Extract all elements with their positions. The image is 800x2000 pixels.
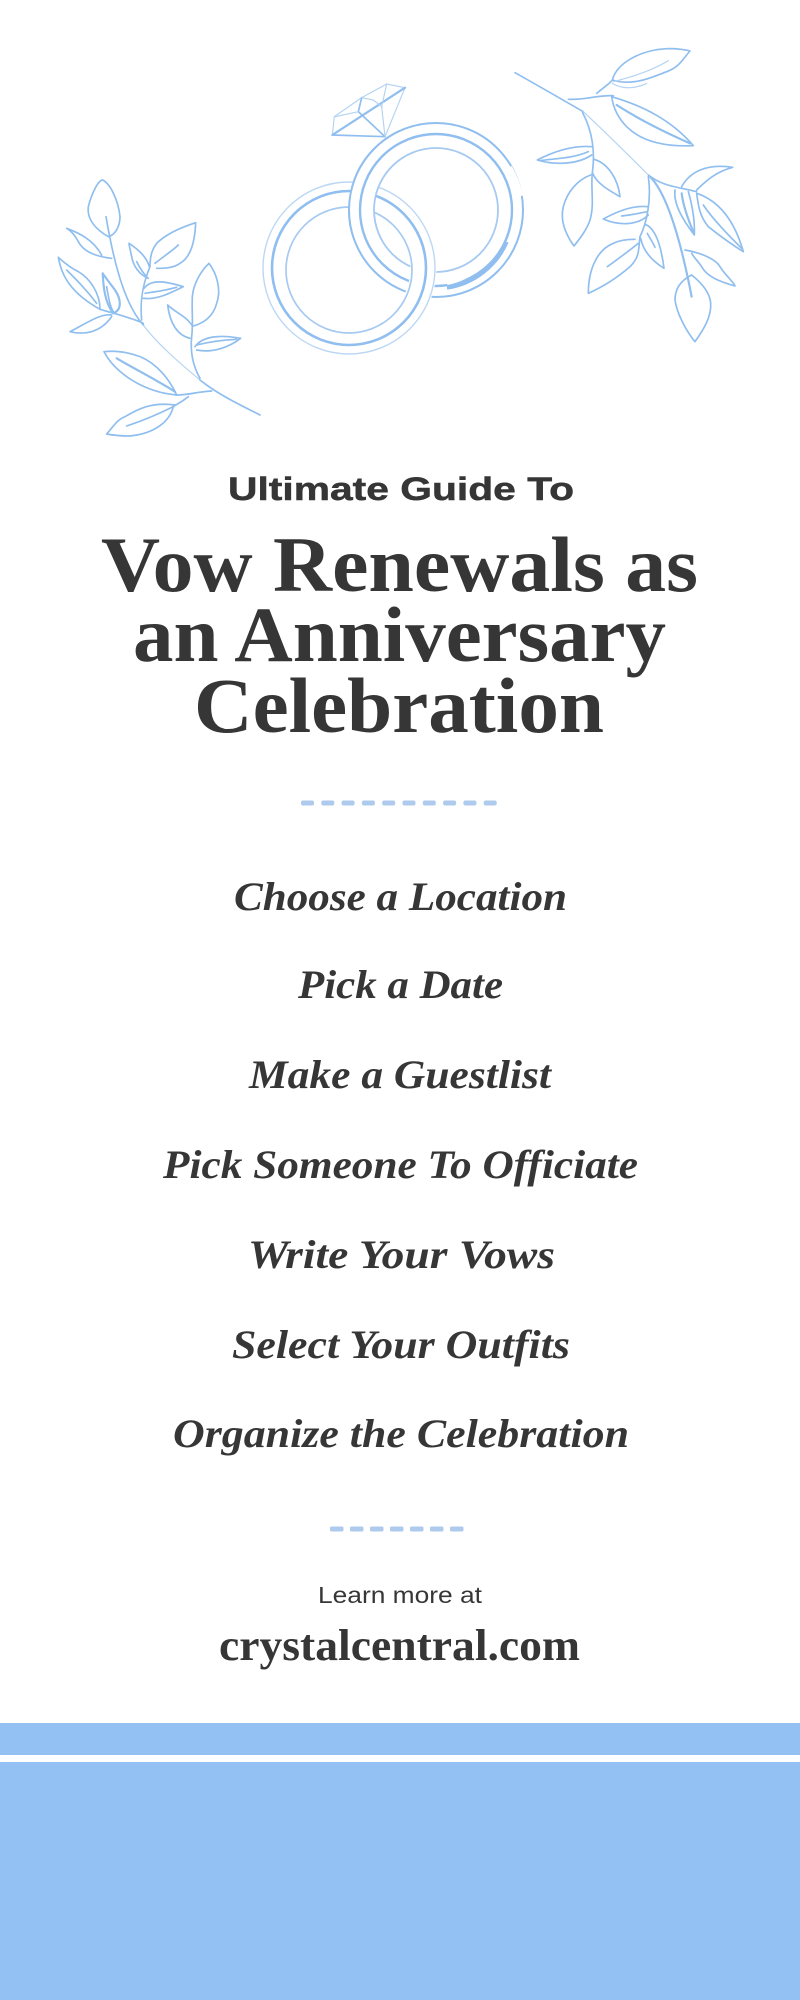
text: website: crystalcentral.com	[219, 1621, 580, 1670]
divider: top dashes	[301, 800, 497, 806]
icon: diamond	[332, 84, 405, 137]
illustration: left leaf sprig	[58, 180, 260, 436]
icon: back ring overlap at top crossing	[348, 130, 400, 240]
list of steps: Pick a Date	[297, 962, 503, 1007]
icon: back ring	[349, 123, 523, 297]
subtitle: Ultimate Guide To	[228, 471, 574, 507]
icon: front ring	[263, 182, 435, 354]
list of steps: Make a Guestlist	[248, 1052, 553, 1097]
list of steps	[162, 874, 638, 1456]
divider: bottom dashes	[330, 1526, 464, 1532]
footer band	[0, 1723, 800, 2000]
illustration: right leaf sprig	[515, 49, 743, 342]
list of steps: Select Your Outfits	[232, 1322, 570, 1367]
list of steps: Choose a Location	[234, 874, 567, 919]
title: Vow Renewals as	[101, 521, 698, 608]
title	[101, 521, 698, 749]
list of steps: Pick Someone To Officiate	[162, 1142, 638, 1187]
text: learn more: Learn more at	[318, 1582, 483, 1608]
list of steps: Write Your Vows	[248, 1232, 555, 1277]
title: Celebration	[194, 662, 604, 749]
illustration: interlocked rings	[263, 123, 523, 354]
title: an Anniversary	[133, 591, 666, 678]
list of steps: Organize the Celebration	[173, 1411, 629, 1456]
